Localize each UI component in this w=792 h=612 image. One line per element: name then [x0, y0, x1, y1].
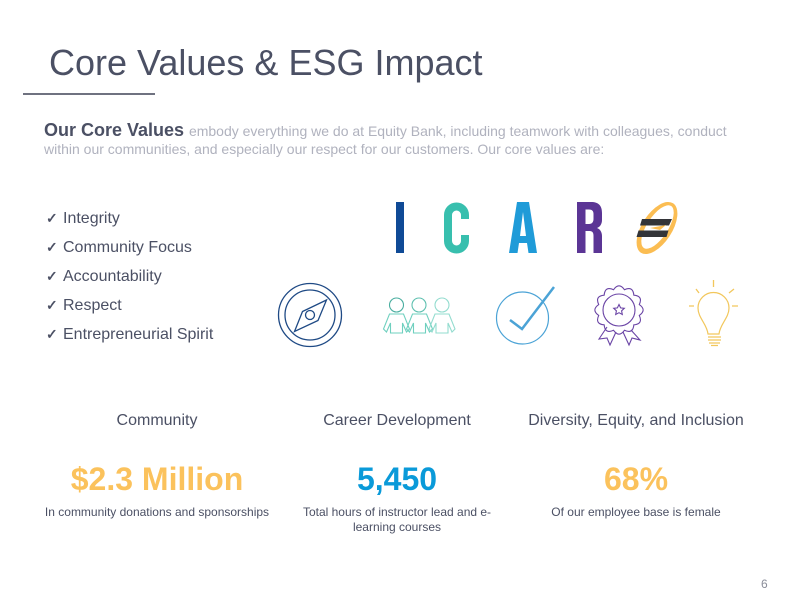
icon: award ribbon [595, 286, 643, 345]
core values list [46, 210, 214, 343]
core values list: Entrepreneurial Spirit [63, 326, 213, 343]
icon: light bulb [689, 280, 738, 346]
intro text [44, 120, 727, 157]
icon: check circle [496, 287, 554, 344]
equity logo [628, 195, 686, 261]
intro text: Our Core Values embody everything we do at Equity Bank, including teamwork with colleagues, conduct [44, 120, 727, 140]
stat label: Career Development [323, 412, 471, 429]
stat: career development [303, 412, 491, 534]
core values list: Respect [63, 297, 122, 314]
stat value: 68% [604, 461, 668, 497]
stat description: learning courses [353, 520, 441, 534]
core values list: Accountability [63, 268, 162, 285]
title: Core Values & ESG Impact [49, 42, 483, 83]
stat: diversity [528, 412, 744, 519]
stat description: In community donations and sponsorships [45, 505, 269, 519]
stat description: Total hours of instructor lead and e- [303, 505, 491, 519]
core values list: Integrity [63, 210, 120, 227]
stat label: Diversity, Equity, and Inclusion [528, 412, 744, 429]
intro text: within our communities, and especially our respect for our customers. Our core values are: [44, 141, 604, 157]
title underline [23, 93, 155, 94]
core values list: ✓ [46, 211, 58, 227]
stat description [303, 505, 491, 534]
stat value: 5,450 [357, 461, 437, 497]
letter C [448, 206, 465, 250]
icon: compass [278, 284, 342, 346]
letter A [509, 202, 537, 253]
letter R [577, 202, 602, 253]
core values list: ✓ [46, 269, 58, 285]
stat label: Community [117, 412, 197, 429]
icon: people [384, 298, 455, 333]
core values list: Community Focus [63, 239, 192, 256]
letter I [396, 202, 404, 253]
stat description: Of our employee base is female [551, 505, 721, 519]
stat value: $2.3 Million [71, 461, 243, 497]
core values list: ✓ [46, 327, 58, 343]
core values list: ✓ [46, 240, 58, 256]
page number: 6 [761, 577, 768, 591]
core values list: ✓ [46, 298, 58, 314]
stat: community [45, 412, 269, 519]
